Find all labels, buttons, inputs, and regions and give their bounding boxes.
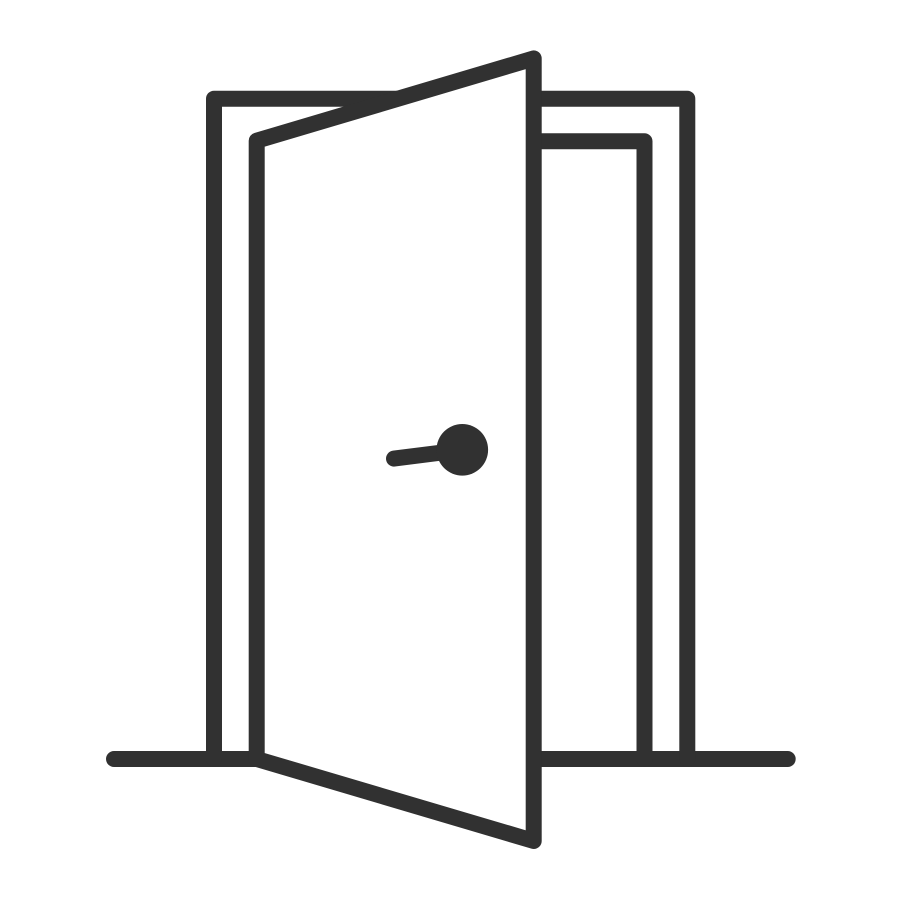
outer door frame — [214, 99, 687, 759]
floor line — [114, 751, 788, 767]
door leaf — [257, 58, 534, 841]
inner door frame — [534, 141, 644, 759]
door handle — [394, 424, 488, 476]
